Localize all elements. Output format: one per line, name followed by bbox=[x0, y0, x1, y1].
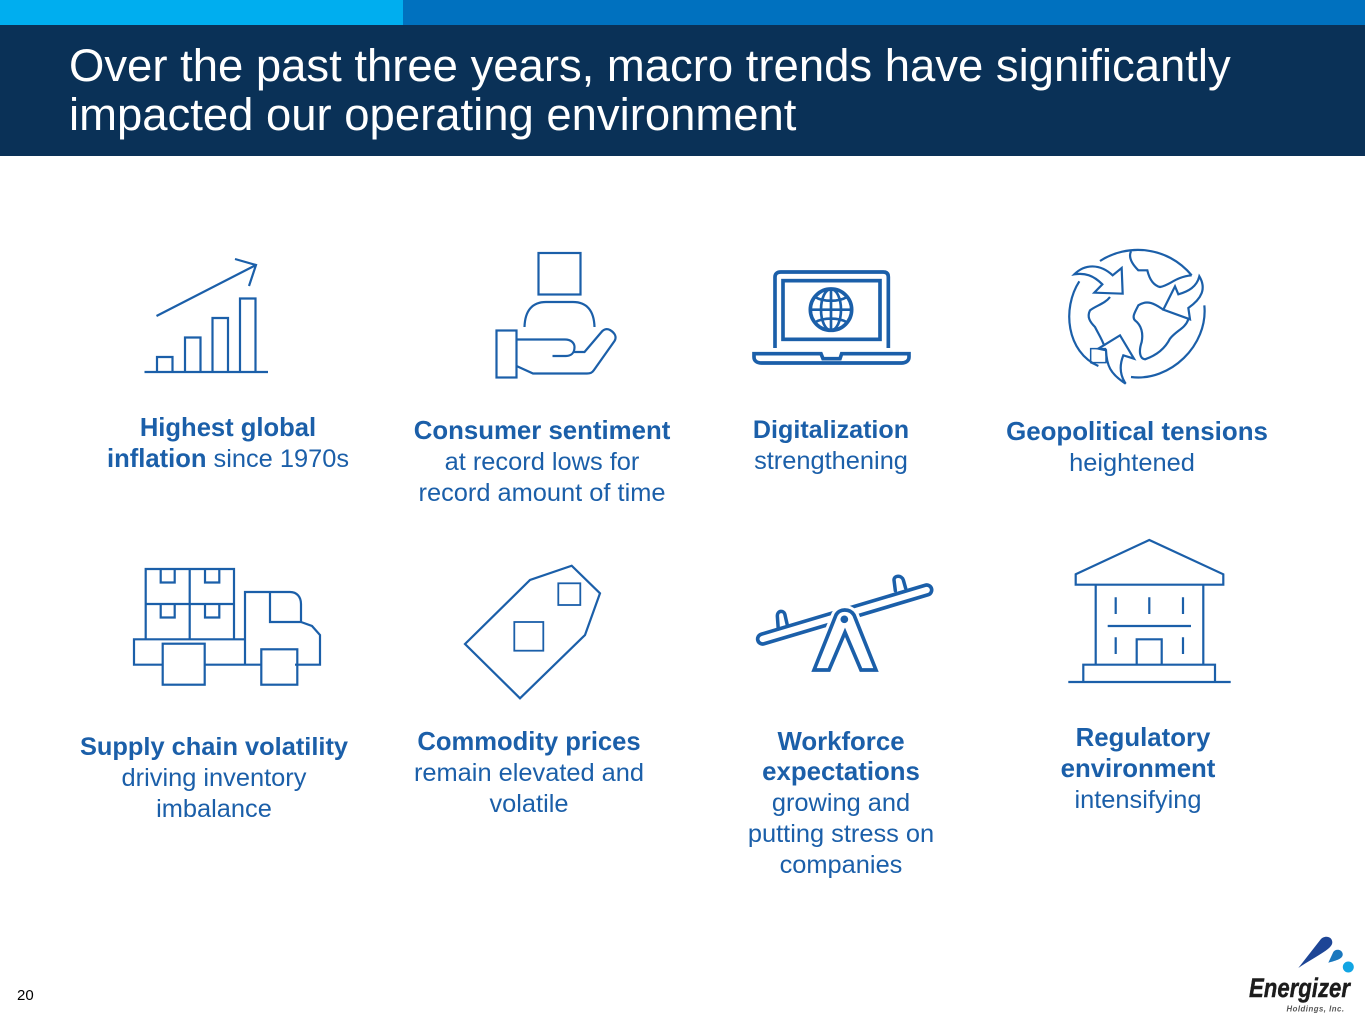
text: consumer sentiment: record amount of time bbox=[419, 479, 665, 507]
text: commodity prices: remain elevated and bbox=[414, 759, 644, 787]
text: consumer sentiment bbox=[414, 417, 670, 507]
text: inflation: inflation since 1970s bbox=[107, 445, 349, 473]
text: supply chain bbox=[80, 733, 348, 823]
text: geopolitical tensions: heightened bbox=[1069, 449, 1195, 477]
text: commodity prices: Commodity prices bbox=[417, 728, 641, 756]
top accent bar bbox=[0, 0, 1365, 25]
logo: Energizer Holdings: Holdings, Inc. bbox=[1286, 1004, 1344, 1013]
text: workforce: expectations bbox=[762, 758, 920, 786]
text: inflation bbox=[107, 414, 349, 473]
text: consumer sentiment: at record lows for bbox=[445, 448, 639, 476]
title: impacted our operating environment bbox=[69, 89, 796, 140]
text: geopolitical tensions bbox=[1006, 418, 1268, 477]
text: regulatory: environment bbox=[1061, 755, 1215, 783]
text: digitalization: strengthening bbox=[754, 447, 908, 475]
title bbox=[69, 40, 1231, 140]
text: digitalization bbox=[753, 416, 909, 475]
title banner bbox=[0, 25, 1365, 156]
text: regulatory: intensifying bbox=[1074, 786, 1202, 814]
text: consumer sentiment: Consumer sentiment bbox=[414, 417, 670, 445]
text: geopolitical tensions: Geopolitical tensions bbox=[1006, 418, 1268, 446]
text: supply chain: Supply chain volatility bbox=[80, 733, 348, 761]
text: workforce bbox=[748, 728, 934, 879]
light blue accent segment bbox=[0, 0, 403, 25]
page number: 20 bbox=[17, 986, 34, 1004]
text: regulatory bbox=[1061, 724, 1216, 814]
text: commodity prices bbox=[414, 728, 644, 818]
text: workforce: Workforce bbox=[777, 728, 905, 756]
text: digitalization: Digitalization bbox=[753, 416, 909, 444]
text: supply chain: driving inventory bbox=[122, 764, 306, 792]
text: workforce: companies bbox=[780, 851, 902, 879]
text: workforce: putting stress on bbox=[748, 820, 934, 848]
text: inflation: Highest global bbox=[140, 414, 316, 442]
text: workforce: growing and bbox=[772, 789, 910, 817]
text: supply chain: imbalance bbox=[156, 795, 272, 823]
text: regulatory: Regulatory bbox=[1076, 724, 1210, 752]
title: Over the past three years, macro trends have significantly bbox=[69, 40, 1231, 91]
text: commodity prices: volatile bbox=[489, 790, 569, 818]
